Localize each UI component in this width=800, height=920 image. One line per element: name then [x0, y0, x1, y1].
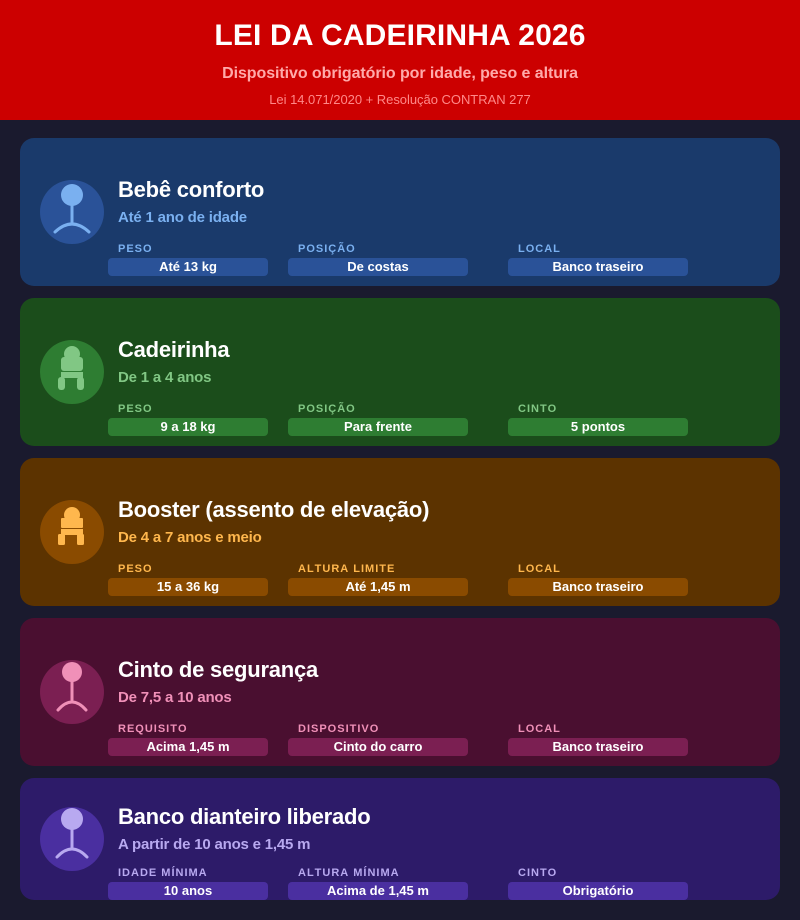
- field: peso: PESO: [118, 403, 153, 415]
- field: peso: 9 a 18 kg: [161, 419, 215, 434]
- heading: Banco dianteiro liberado: [118, 804, 370, 829]
- age: De 4 a 7 anos e meio: [118, 529, 262, 546]
- field: local: LOCAL: [518, 563, 561, 575]
- field: dispositivo: DISPOSITIVO: [298, 723, 379, 735]
- field: cinto: [508, 403, 688, 436]
- field: cinto: CINTO: [518, 867, 557, 879]
- field: local: [508, 243, 688, 276]
- field: posição: POSIÇÃO: [298, 403, 356, 415]
- header: [0, 0, 800, 120]
- field: altura mínima: ALTURA MÍNIMA: [298, 867, 400, 879]
- field: requisito: Acima 1,45 m: [146, 739, 230, 754]
- heading: Cadeirinha: [118, 337, 229, 362]
- field: posição: POSIÇÃO: [298, 243, 356, 255]
- field: altura mínima: Acima de 1,45 m: [327, 883, 429, 898]
- icon: baby: [40, 180, 104, 244]
- field: cinto: [508, 867, 688, 900]
- field: local: Banco traseiro: [552, 739, 644, 754]
- icon: child seat: [40, 340, 104, 404]
- field: posição: [288, 402, 468, 436]
- field: cinto: CINTO: [518, 403, 557, 415]
- field: idade mínima: IDADE MÍNIMA: [118, 867, 208, 879]
- field: requisito: [108, 723, 268, 756]
- field: dispositivo: Cinto do carro: [334, 739, 422, 754]
- legal reference: Lei 14.071/2020 + Resolução CONTRAN 277: [269, 92, 531, 107]
- field: idade mínima: [108, 866, 268, 900]
- field: posição: Para frente: [344, 419, 412, 434]
- field: cinto: Obrigatório: [563, 883, 633, 898]
- age: A partir de 10 anos e 1,45 m: [118, 836, 310, 853]
- field: peso: [108, 563, 268, 596]
- field: local: LOCAL: [518, 723, 561, 735]
- field: local: [508, 723, 688, 756]
- heading: Booster (assento de elevação): [118, 497, 429, 522]
- field: peso: PESO: [118, 243, 153, 255]
- age: De 7,5 a 10 anos: [118, 689, 232, 706]
- panel: Cinto de segurança: [20, 618, 780, 766]
- field: peso: Até 13 kg: [159, 259, 217, 274]
- field: posição: [288, 242, 468, 276]
- field: cinto: 5 pontos: [571, 419, 625, 434]
- icon: front seat user: [40, 807, 104, 871]
- heading: Bebê conforto: [118, 177, 264, 202]
- field: altura limite: ALTURA LIMITE: [298, 563, 395, 575]
- panel: Banco dianteiro liberado: [20, 778, 780, 900]
- field: requisito: REQUISITO: [118, 723, 188, 735]
- field: dispositivo: [288, 723, 468, 756]
- field: local: Banco traseiro: [552, 259, 644, 274]
- field: altura limite: Até 1,45 m: [345, 579, 411, 594]
- panel: Booster: [20, 458, 780, 606]
- panel: Bebê conforto: [20, 138, 780, 286]
- field: peso: PESO: [118, 563, 153, 575]
- age: Até 1 ano de idade: [118, 209, 247, 226]
- icon: seat belt user: [40, 660, 104, 724]
- field: peso: 15 a 36 kg: [157, 579, 219, 594]
- age: De 1 a 4 anos: [118, 369, 211, 386]
- field: peso: [108, 243, 268, 276]
- field: local: Banco traseiro: [552, 579, 644, 594]
- field: peso: [108, 403, 268, 436]
- title: LEI DA CADEIRINHA 2026: [214, 19, 586, 52]
- field: local: [508, 563, 688, 596]
- field: posição: De costas: [347, 259, 409, 274]
- icon: booster seat: [40, 500, 104, 564]
- field: local: LOCAL: [518, 243, 561, 255]
- field: idade mínima: 10 anos: [164, 883, 212, 898]
- heading: Cinto de segurança: [118, 657, 318, 682]
- field: altura limite: [288, 563, 468, 596]
- field: altura mínima: [288, 866, 468, 900]
- panel: Cadeirinha: [20, 298, 780, 446]
- subtitle: Dispositivo obrigatório por idade, peso e altura: [222, 65, 578, 82]
